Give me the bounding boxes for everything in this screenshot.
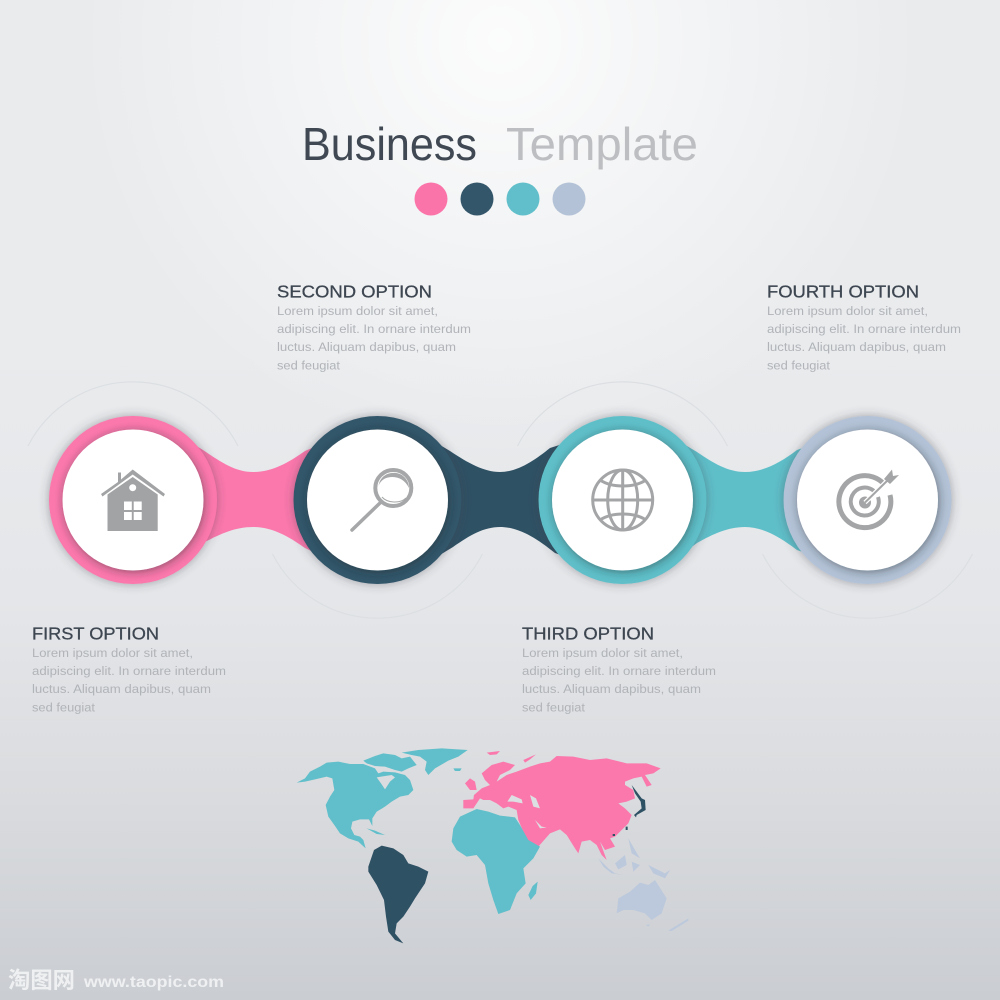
text block: fourth option: luctus. Aliquam dapibus, quam bbox=[767, 340, 946, 354]
connector: dark bbox=[415, 430, 575, 570]
text block: first option bbox=[32, 624, 226, 714]
connector: pink bbox=[170, 430, 330, 570]
text block: fourth option: adipiscing elit. In ornare interdum bbox=[767, 322, 961, 336]
watermark bbox=[8, 968, 224, 993]
text block: fourth option bbox=[767, 282, 961, 372]
text block: third option: THIRD OPTION bbox=[522, 624, 654, 644]
text block: fourth option: FOURTH OPTION bbox=[767, 282, 919, 302]
text block: second option: sed feugiat bbox=[277, 358, 341, 372]
text block: second option: adipiscing elit. In ornare interdum bbox=[277, 322, 471, 336]
timeline bbox=[49, 416, 952, 584]
colour dots bbox=[414, 182, 586, 216]
watermark: 淘图网 bbox=[8, 968, 75, 993]
step 2: dark circle bbox=[294, 416, 462, 584]
text block: second option bbox=[277, 282, 471, 372]
text block: second option: SECOND OPTION bbox=[277, 282, 432, 302]
text block: fourth option: Lorem ipsum dolor sit amet, bbox=[767, 304, 928, 318]
text block: first option: sed feugiat bbox=[32, 700, 96, 714]
text block: first option: luctus. Aliquam dapibus, quam bbox=[32, 682, 211, 696]
text block: second option: Lorem ipsum dolor sit amet, bbox=[277, 304, 438, 318]
title: Business bbox=[302, 118, 477, 170]
title bbox=[302, 118, 698, 170]
world map bbox=[297, 748, 688, 943]
step 4: blue-grey circle bbox=[784, 416, 952, 584]
text block: third option bbox=[522, 624, 716, 714]
text block: first option: FIRST OPTION bbox=[32, 624, 159, 644]
title: Template bbox=[506, 118, 698, 170]
text block: first option: Lorem ipsum dolor sit amet, bbox=[32, 646, 193, 660]
Eurasia bbox=[463, 751, 661, 860]
connector: teal bbox=[660, 430, 825, 570]
text block: second option: luctus. Aliquam dapibus, quam bbox=[277, 340, 456, 354]
icon: target bbox=[839, 470, 899, 528]
text block: third option: Lorem ipsum dolor sit amet, bbox=[522, 646, 683, 660]
icon: house bbox=[101, 470, 165, 531]
watermark: www.taopic.com bbox=[83, 974, 224, 991]
North America and Greenland bbox=[297, 748, 468, 848]
text block: third option: luctus. Aliquam dapibus, quam bbox=[522, 682, 701, 696]
step 3: teal circle bbox=[538, 416, 706, 584]
Oceania bbox=[598, 838, 688, 931]
step 1: pink circle bbox=[49, 416, 217, 584]
icon: magnifier bbox=[352, 470, 411, 530]
text block: first option: adipiscing elit. In ornare interdum bbox=[32, 664, 226, 678]
text block: third option: adipiscing elit. In ornare interdum bbox=[522, 664, 716, 678]
text block: fourth option: sed feugiat bbox=[767, 358, 831, 372]
text block: third option: sed feugiat bbox=[522, 700, 586, 714]
Africa and South America bbox=[368, 809, 540, 943]
icon: globe bbox=[593, 470, 653, 530]
decorative arcs around circles bbox=[28, 382, 972, 618]
Japan, Taiwan and Hainan bbox=[613, 785, 646, 836]
